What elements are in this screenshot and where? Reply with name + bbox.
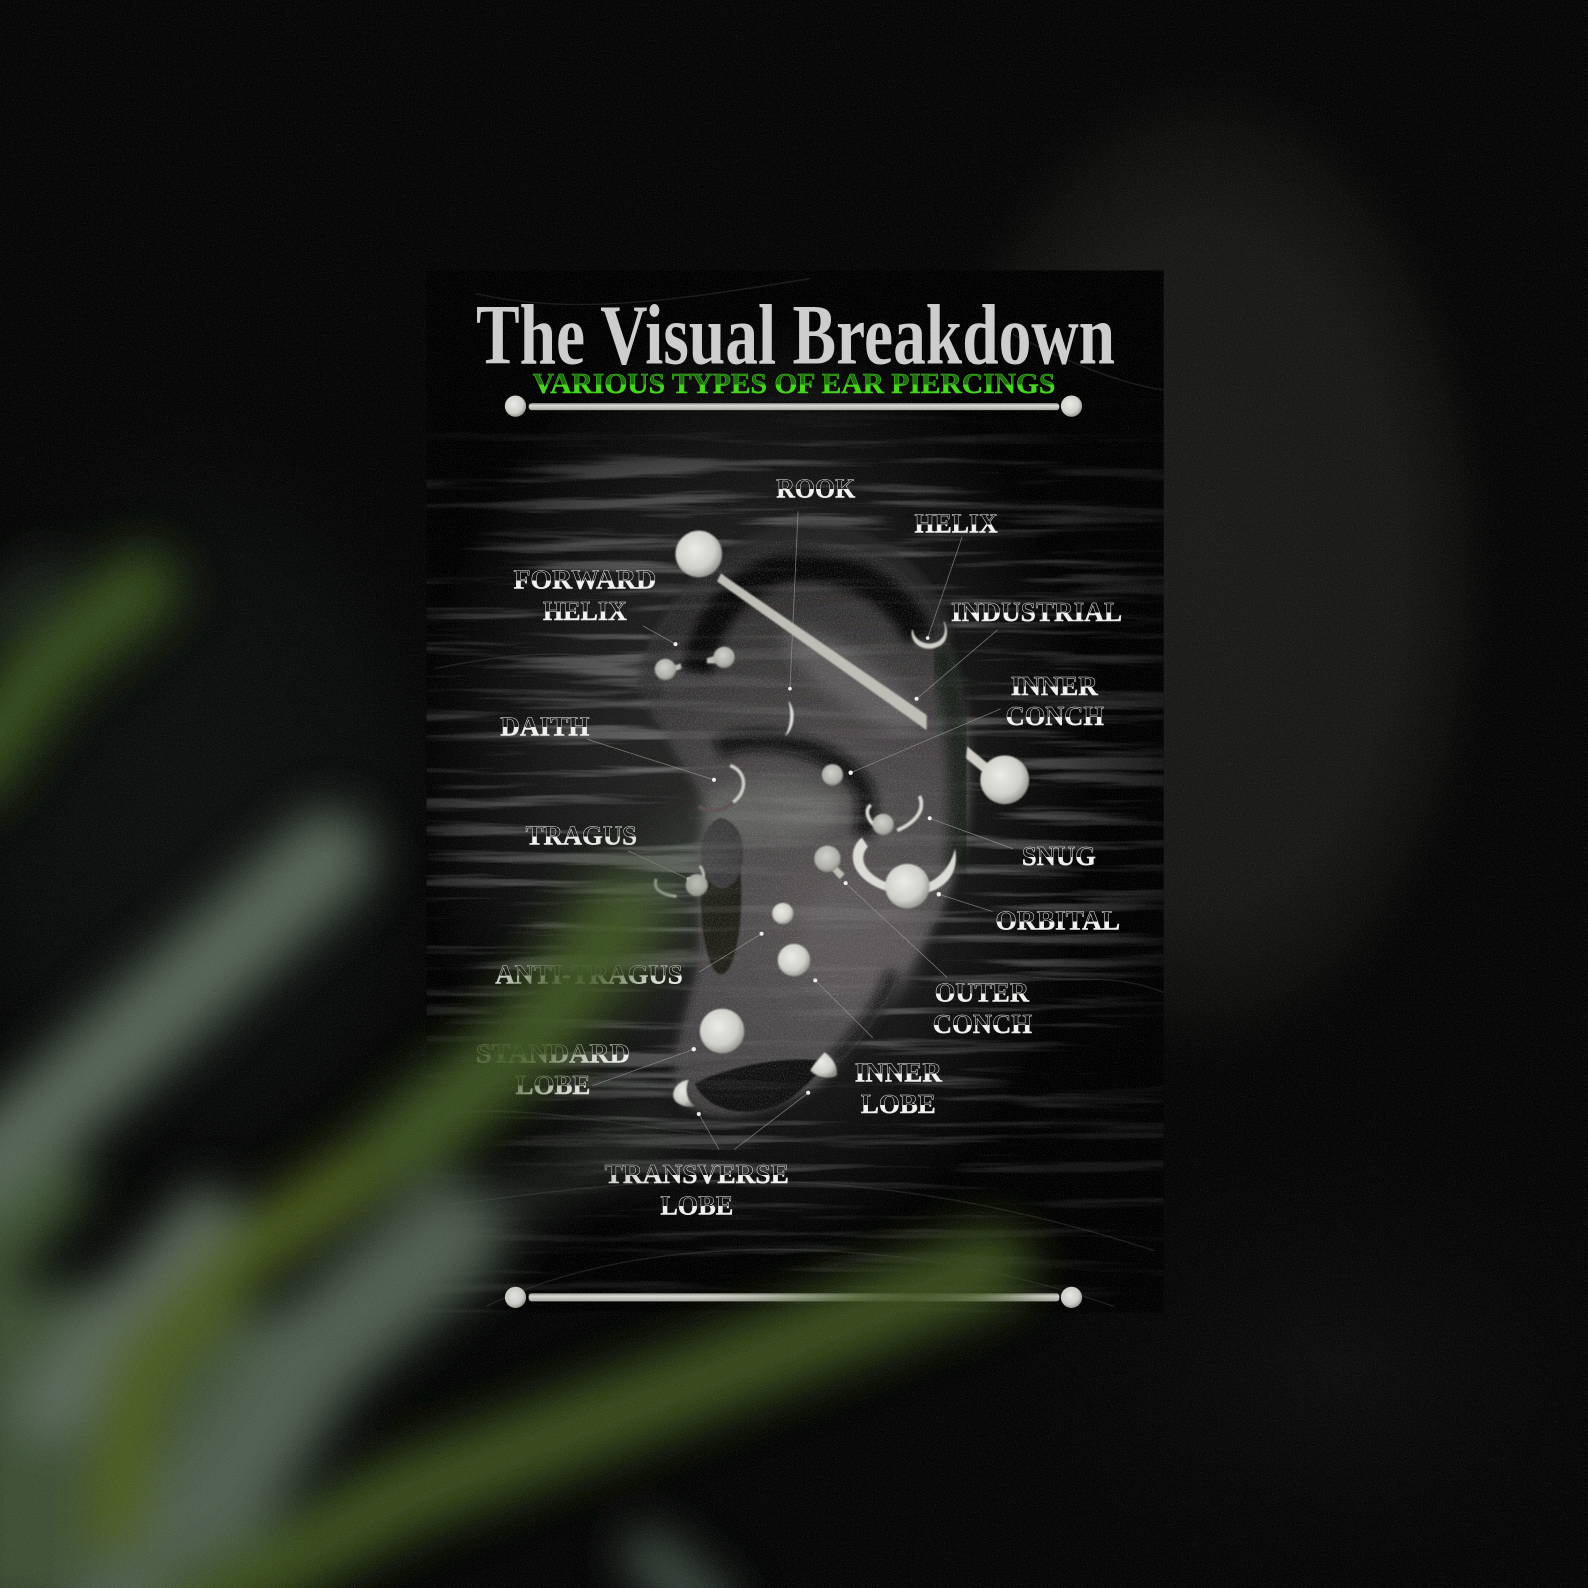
inner lobe stud [810, 1052, 837, 1078]
helix fold [697, 567, 920, 673]
labels: CONCH [933, 1009, 1032, 1039]
poster central glow [456, 374, 1053, 1206]
upper left leaf tip [0, 567, 51, 628]
canal top tint [701, 819, 743, 888]
labels: ORBITAL [996, 906, 1120, 936]
antihelix shadow [717, 740, 867, 837]
central green leaf [405, 911, 628, 1144]
labels: LOBE [660, 1190, 733, 1220]
bottom barbell divider [505, 1287, 1082, 1308]
lobe crescent [695, 1060, 825, 1112]
grey band [51, 1220, 208, 1408]
labels: INDUSTRIAL [951, 597, 1122, 627]
tragus ring [655, 866, 708, 896]
labels: CONCH [1006, 701, 1104, 731]
transverse lobe stud [673, 1080, 695, 1107]
labels: SNUG [1022, 841, 1096, 871]
rook ring [786, 702, 793, 735]
ear illustration [640, 535, 970, 1117]
title: The Visual Breakdown [476, 287, 1115, 383]
labels: LOBE [515, 1070, 590, 1100]
lower left base [0, 1286, 294, 1588]
labels: TRANSVERSE [605, 1159, 789, 1189]
labels: DAITH [500, 711, 589, 741]
foreground blurred leaves [0, 567, 993, 1588]
ear rim shade [648, 535, 942, 699]
faint pale leaf over poster [451, 1134, 648, 1238]
conch stud [814, 846, 845, 879]
subtitle: VARIOUS TYPES OF EAR PIERCINGS [533, 369, 1055, 400]
lower conch stud [778, 944, 810, 976]
ear silhouette [640, 540, 970, 1117]
labels: INNER [1011, 671, 1098, 701]
poster [420, 270, 1164, 1313]
right jaw shade [832, 972, 893, 1061]
daith ring [699, 766, 744, 811]
bottom shard [648, 1555, 709, 1588]
labels: STANDARD [476, 1038, 630, 1068]
wrinkled paper texture [426, 270, 1164, 1313]
labels: LOBE [861, 1089, 936, 1119]
top barbell divider [505, 395, 1082, 417]
labels: INNER [855, 1058, 942, 1088]
labels: HELIX [915, 509, 998, 539]
central pale tip [638, 836, 714, 901]
labels: HELIX [543, 596, 627, 626]
poster sheet [426, 270, 1164, 1313]
grey-green band [122, 1236, 451, 1588]
anti-tragus stud [772, 903, 793, 924]
industrial barbell [676, 531, 1029, 804]
upper left leaf [0, 587, 142, 770]
labels: TRAGUS [526, 821, 637, 851]
grey-green leaf [0, 856, 329, 1185]
wrinkles over ear [442, 459, 1127, 1183]
helix ring [912, 622, 946, 648]
labels: FORWARD [513, 564, 656, 594]
lower strip green [0, 1185, 61, 1281]
ear canal [701, 818, 741, 974]
jewellery [655, 531, 1029, 1107]
leader lines [587, 511, 1013, 1149]
skin speckle [640, 540, 970, 1117]
right helix strip [940, 648, 960, 871]
long bottom leaf [192, 1266, 992, 1588]
orbital ring [853, 838, 956, 908]
inner conch stud [822, 764, 843, 785]
labels: ANTI-TRAGUS [495, 959, 683, 989]
labels [476, 473, 1122, 1220]
forward helix studs [655, 647, 735, 680]
highlight along bar [770, 612, 931, 745]
standard lobe stud [700, 1009, 744, 1053]
labels: OUTER [935, 978, 1029, 1008]
centre haze [699, 780, 841, 841]
lower concha light [800, 871, 922, 1013]
snug ring [867, 796, 921, 835]
olive leaf [116, 1144, 405, 1529]
labels: ROOK [776, 473, 856, 503]
